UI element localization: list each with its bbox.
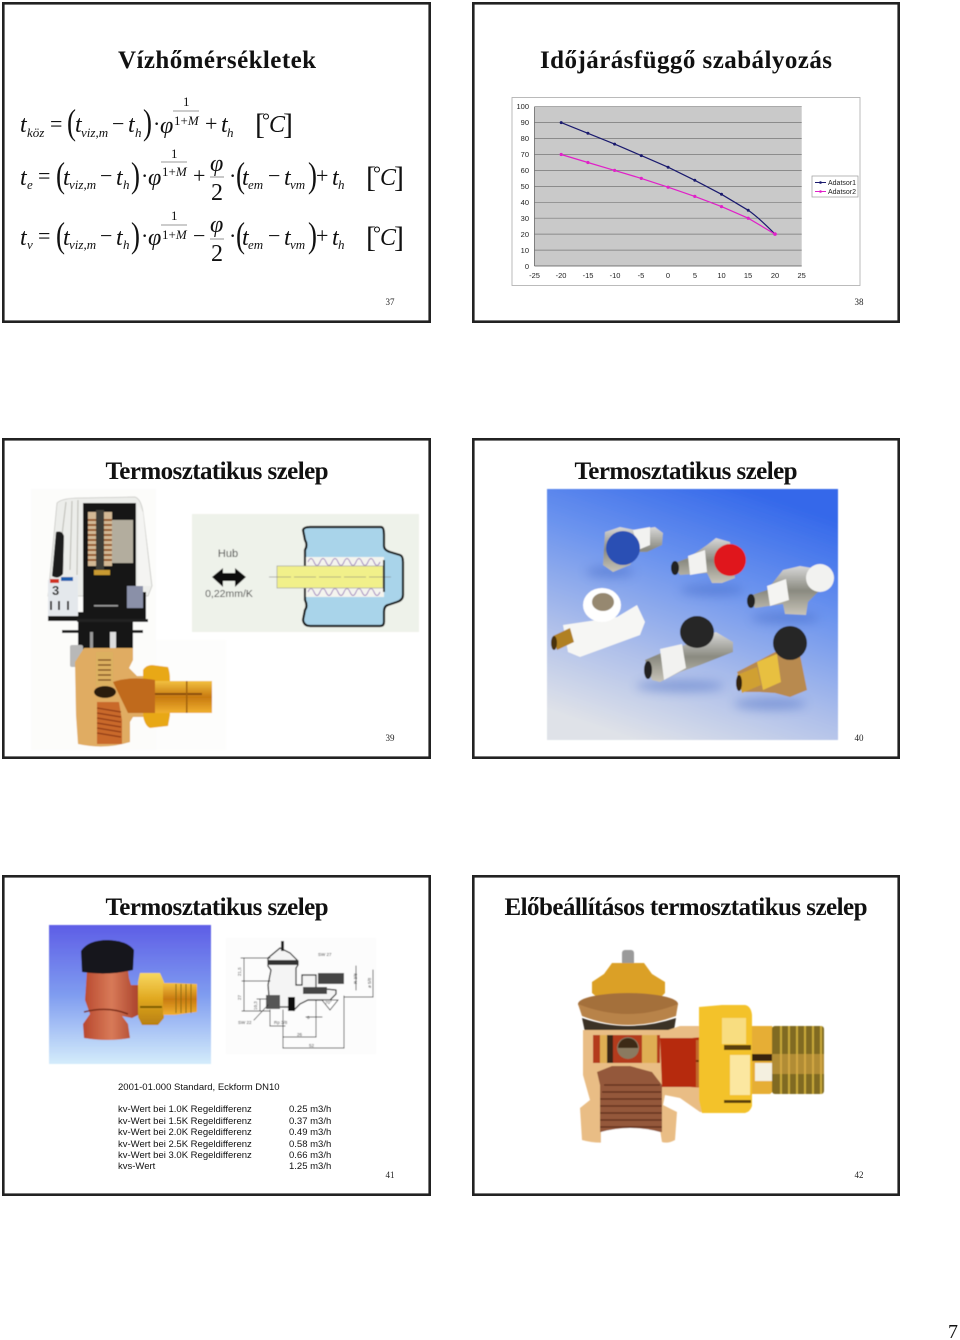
formula: t köz: ) [143,102,152,142]
formula: t v: viz,m [69,237,96,252]
formula: t v: = [38,223,50,248]
technical drawing: valve dimensions: ø 5/8 [367,977,372,988]
formula: t v: ) [131,215,140,255]
technical drawing: valve dimensions: 21,5 [237,967,242,976]
formula: t e: + [193,163,205,188]
formula: t e: t [284,165,292,191]
table: kv values: kv-Wert bei 2.5K Regeldifferenz [118,1139,252,1150]
x axis labels: 10 [717,271,726,280]
formula: t e: φ [148,165,161,191]
x axis labels: -5 [638,271,644,280]
formula: t e: φ [210,151,223,177]
y axis labels: 30 [521,214,529,223]
y axis labels: 90 [521,118,529,127]
legend: Adatsor2 [828,189,856,196]
technical drawing: valve dimensions: 10,3 [253,1001,258,1010]
formula: t v: t [332,225,340,251]
table: kv values: 0.37 m3/h [289,1116,331,1127]
x axis labels: -25 [529,271,540,280]
photo: angle valve [49,925,211,1064]
table: kv values: 0.58 m3/h [289,1139,331,1150]
table: kv values: kvs-Wert [118,1161,156,1172]
formula: t köz: ( [67,102,76,142]
formula: t e: t [242,165,250,191]
formula: t e: [ [366,161,376,194]
formula: t v: 1+M [162,227,188,242]
formula: t köz: 1 [183,94,190,109]
formula: t köz: t [20,112,28,138]
formula: t v: h [338,237,344,252]
y axis labels: 40 [521,198,529,207]
formula: t köz: [ [255,108,265,141]
formula: t e: · [229,163,236,188]
formula: t e: ( [56,155,65,195]
formula: t e: C [380,165,397,191]
technical drawing: valve dimensions: 27 [237,994,242,1000]
x axis labels: 20 [771,271,779,280]
formula: t v: ] [394,221,404,254]
table: kv values: kv-Wert bei 2.0K Regeldifferenz [118,1127,252,1138]
formula: t v: φ [148,225,161,251]
formula: t v: ) [308,215,317,255]
y axis labels: 60 [521,166,529,175]
table: kv values [118,1104,331,1172]
formula: t v: t [20,225,28,251]
formula: t v: 2 [211,241,223,267]
x axis labels: 0 [666,271,670,280]
table: kv values: 1.25 m3/h [289,1161,331,1172]
formula: t köz: h [227,125,234,140]
table: kv values: 0.66 m3/h [289,1150,331,1161]
formula: t v: ( [236,215,245,255]
y axis labels: 50 [521,182,529,191]
table: kv values: kv-Wert bei 3.0K Regeldifferenz [118,1150,252,1161]
formula: t v: 1 [171,208,178,223]
technical drawing: valve dimensions: SW 27 [318,952,332,957]
formula: t e: ] [394,161,404,194]
formula: t e: = [38,163,50,188]
formula: t v: ( [56,215,65,255]
x axis labels: -20 [556,271,566,280]
formula: t köz: + [205,111,217,136]
technical drawing: valve dimensions: 70° [325,1000,332,1005]
formula: t köz: köz [27,125,44,140]
slide number 41: 41 [386,1170,394,1180]
formula: t köz: C [269,112,286,138]
technical drawing: valve dimensions: Rp 3/8 [274,1020,288,1025]
formula: t köz: − [112,111,124,136]
formula: t v: em [248,237,263,252]
slide number 37: 37 [386,297,395,307]
technical drawing: valve dimensions [226,938,376,1054]
formula: t köz: t [128,112,136,138]
formula: t e: ( [236,155,245,195]
formula: t e: h [123,177,130,192]
formula: t e: − [100,163,112,188]
formula: t e: ° [373,163,381,185]
formula: t e: ) [131,155,140,195]
formula: t v: t [63,225,71,251]
formula: t köz: t [75,112,83,138]
y axis labels: 80 [521,134,529,143]
series Adatsor1 [560,121,775,234]
formula: t e: 1+M [162,164,188,179]
technical drawing: valve dimensions: 6 [307,1015,310,1020]
x axis labels: -15 [583,271,593,280]
formula: t köz: ° [262,110,270,132]
y axis labels: 0 [525,262,529,271]
x axis labels [529,271,806,280]
table: kv values: kv-Wert bei 1.5K Regeldifferenz [118,1116,252,1127]
slide number 42: 42 [854,1170,864,1180]
legend [812,176,858,197]
photo: six valves on blue background [547,489,838,740]
y axis labels: 70 [521,150,529,159]
slide number 40: 40 [854,733,864,743]
formula: t v: C [380,225,397,251]
illustration: valve cutaway [31,489,226,750]
line chart [512,98,860,286]
formula: t e: t [332,165,340,191]
slide number 38: 38 [854,297,864,307]
formula: t e: + [316,163,328,188]
panel: water temperatures [3,3,430,322]
formula: t e: t [20,165,28,191]
formula: t v [20,208,404,267]
formula: t e: − [268,163,280,188]
formula: t v: · [141,223,148,248]
formula: t v: t [116,225,124,251]
icon: double arrow [212,568,246,587]
formula: t v: t [284,225,292,251]
panel: weather-compensated control [473,3,899,322]
title: Termosztatikus szelep [106,458,328,485]
label: Hub: Hub [218,548,238,560]
formula: t e: · [141,163,148,188]
table: kv values: 0.25 m3/h [289,1104,331,1115]
technical drawing: valve dimensions: SW 22 [238,1020,252,1025]
formula: t köz: 1+M [174,113,200,128]
series Adatsor2 [560,153,777,236]
label: 0,22mm/K: 0,22mm/K [205,588,253,600]
formula: t köz [20,94,293,142]
formula: t e: vm [290,177,305,192]
diagram: sensor stroke [192,514,419,632]
formula: t e: ) [308,155,317,195]
formula: t köz: h [135,125,142,140]
text: product name: 2001-01.000 Standard, Eckform DN10 [118,1082,280,1093]
technical drawing: valve dimensions: 26 [297,1032,303,1037]
formula: t v: vm [290,237,305,252]
x axis labels: 25 [798,271,806,280]
table: kv values: 0.49 m3/h [289,1127,331,1138]
formula: t köz: t [221,112,229,138]
panel: valve specification [3,876,430,1195]
technical drawing: valve dimensions: R 3/8 [353,973,358,984]
formula: t köz: · [153,111,160,136]
legend: Adatsor1 [828,180,856,187]
formula: t köz: = [50,111,62,136]
formula: t v: − [193,223,205,248]
formula: t e: viz,m [69,177,96,192]
formula: t v: · [229,223,236,248]
x axis labels: 15 [744,271,752,280]
y axis labels: 10 [521,246,529,255]
table: kv values: kv-Wert bei 1.0K Regeldifferenz [118,1104,252,1115]
y axis labels: 20 [521,230,529,239]
formula: t v: t [242,225,250,251]
formula: t v: φ [210,212,223,238]
formula: t e: t [116,165,124,191]
formula: t v: − [268,223,280,248]
formula: t v: − [100,223,112,248]
y axis labels: 100 [516,102,529,111]
slide number 39: 39 [386,733,395,743]
formula: t e: 2 [211,180,223,206]
title: Időjárásfüggő szabályozás: Időjárásfüggő szabályozás [540,47,832,74]
title: Termosztatikus szelep [106,894,328,921]
panel: thermostatic valve cutaway [3,439,430,758]
formula: t köz: ] [283,108,293,141]
x axis labels: 5 [693,271,697,280]
formula: t köz: viz,m [81,125,108,140]
formula: t v: + [316,223,328,248]
technical drawing: valve dimensions: 52 [309,1043,315,1048]
formula: t e: e [27,177,33,192]
formula: t v: v [27,237,33,252]
formula: t e: 1 [171,146,178,161]
title: Előbeállításos termosztatikus szelep [504,894,868,921]
y axis labels [516,102,529,271]
formula: t v: ° [373,223,381,245]
illustration: valve cross-section [578,950,824,1143]
title: Vízhőmérsékletek: Vízhőmérsékletek [118,47,316,74]
illustration: valve cutaway: 3 [52,583,59,598]
formula: t v: [ [366,221,376,254]
x axis labels: -10 [610,271,620,280]
panel: presettable thermostatic valve [473,876,899,1195]
formula: t köz: φ [160,113,173,139]
formula: t e: t [63,165,71,191]
title: Termosztatikus szelep [574,458,798,485]
formula: t e: h [338,177,344,192]
formula: t e: em [248,177,263,192]
formula: t v: h [123,237,130,252]
panel: thermostatic valve product range [473,439,899,758]
formula: t e [20,146,404,206]
